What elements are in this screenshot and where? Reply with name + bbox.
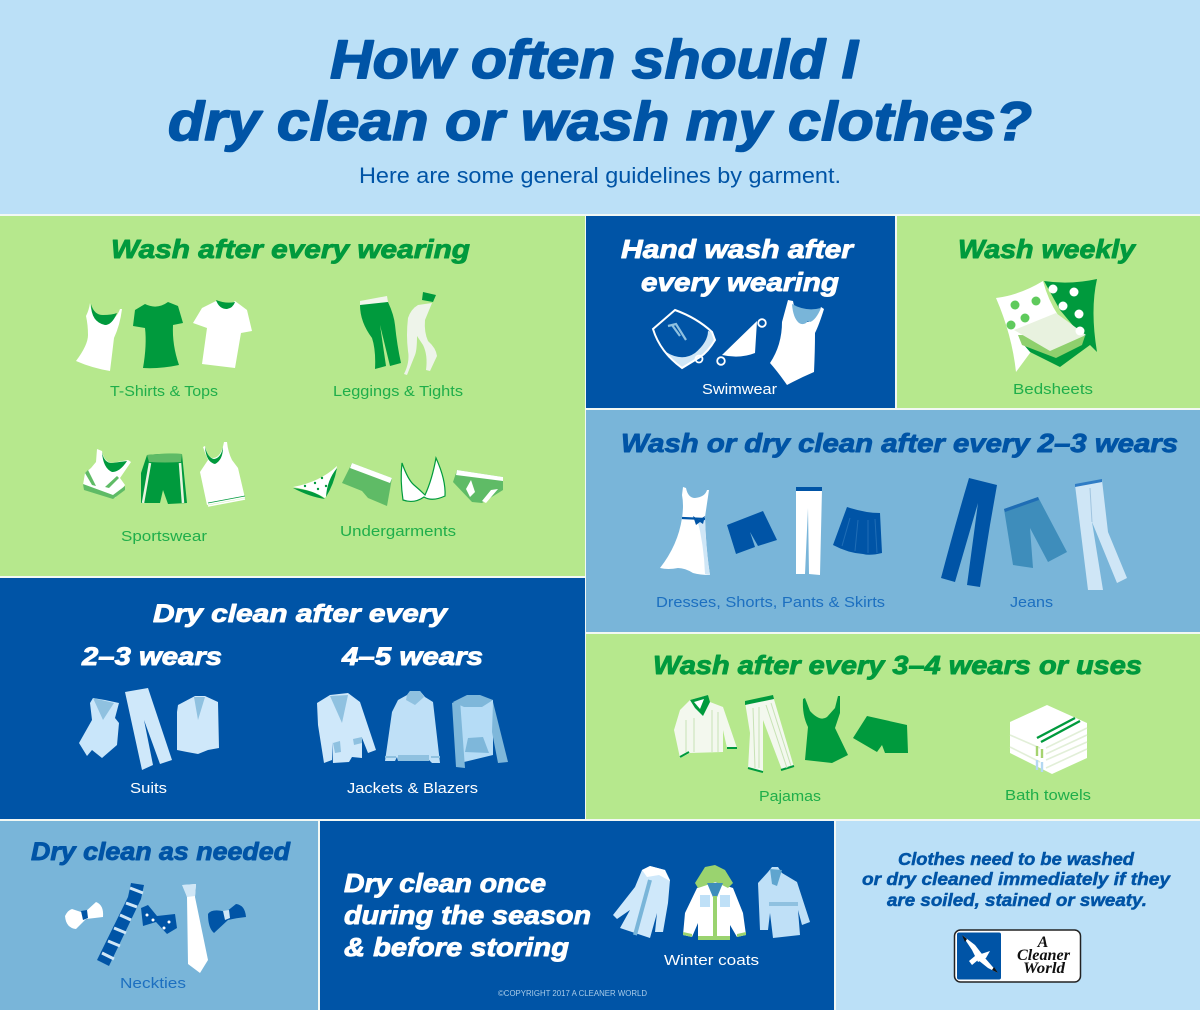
- title: How often should I: [330, 28, 860, 90]
- heading: Wash or dry clean after every 2–3 wears: [621, 428, 1178, 458]
- logo: Cleaner: [1017, 947, 1071, 964]
- note text: Clothes need to be washed: [898, 849, 1134, 869]
- label: Neckties: [120, 975, 186, 992]
- heading: Wash after every wearing: [111, 234, 470, 264]
- panel: dry clean after every: [0, 578, 585, 819]
- label: Jackets & Blazers: [347, 780, 478, 797]
- panel: header: [0, 0, 1200, 214]
- heading: every wearing: [641, 267, 839, 297]
- heading: during the season: [344, 900, 591, 930]
- icon: undergarments: [293, 458, 503, 506]
- title: dry clean or wash my clothes?: [168, 90, 1032, 152]
- panel: dry clean as needed: [0, 821, 318, 1010]
- icon: sportswear: [83, 442, 245, 506]
- subtitle: Here are some general guidelines by garment.: [359, 163, 841, 188]
- label: Winter coats: [664, 952, 759, 969]
- heading: [621, 234, 855, 297]
- icon: dress, shorts, pants, skirt: [660, 487, 882, 575]
- icon: t-shirts and tops: [76, 300, 252, 371]
- icon: bedsheets: [996, 279, 1097, 372]
- icon: winter coats: [613, 865, 810, 940]
- subheading: 2-3 wears: 2–3 wears: [81, 643, 222, 671]
- icon: leggings and tights: [360, 292, 437, 375]
- label: Sportswear: [121, 528, 207, 545]
- heading: & before storing: [344, 932, 569, 962]
- heading: Dry clean once: [344, 868, 546, 898]
- label: Suits: [130, 780, 167, 797]
- panel: wash after every 3-4 wears: [586, 634, 1200, 819]
- label: T-Shirts & Tops: [110, 383, 218, 400]
- icon: suits: [79, 688, 219, 770]
- heading: [344, 868, 591, 962]
- icon: jeans: [941, 478, 1127, 590]
- icon: neckties: [65, 883, 246, 973]
- label: Undergarments: [340, 523, 456, 540]
- heading: Hand wash after: [621, 234, 855, 264]
- panel: hand wash: [586, 216, 895, 408]
- logo: A: [1037, 934, 1049, 951]
- copyright: ©COPYRIGHT 2017 A CLEANER WORLD: [498, 989, 647, 998]
- icon: jackets and blazers: [317, 691, 508, 768]
- label: Jeans: [1010, 594, 1053, 611]
- icon: bath towels: [1010, 705, 1087, 774]
- subheading: 4-5 wears: 4–5 wears: [341, 643, 483, 671]
- label: Bath towels: [1005, 787, 1091, 804]
- heading: Wash weekly: [958, 234, 1137, 264]
- icon: pajamas: [674, 695, 908, 772]
- heading: Dry clean after every: [153, 600, 448, 628]
- heading: Wash after every 3–4 wears or uses: [653, 650, 1142, 680]
- panel: dry clean once during the season: [320, 821, 834, 1010]
- title: [168, 28, 1032, 152]
- panel: wash weekly: [897, 216, 1200, 408]
- label: Dresses, Shorts, Pants & Skirts: [656, 594, 885, 611]
- panel: wash or dry clean every 2-3 wears: [586, 410, 1200, 632]
- label: Swimwear: [702, 381, 777, 398]
- label: Pajamas: [759, 788, 821, 805]
- panel: note and logo: [836, 821, 1200, 1010]
- label: Bedsheets: [1013, 381, 1093, 398]
- label: Leggings & Tights: [333, 383, 463, 400]
- logo: [954, 930, 1080, 982]
- note text: are soiled, stained or sweaty.: [887, 890, 1147, 910]
- logo: World: [1023, 960, 1066, 977]
- note text: [862, 849, 1171, 910]
- panel: wash after every wearing: [0, 216, 585, 576]
- heading: Dry clean as needed: [31, 838, 291, 866]
- icon: swimwear: [653, 300, 824, 385]
- note text: or dry cleaned immediately if they: [862, 869, 1171, 889]
